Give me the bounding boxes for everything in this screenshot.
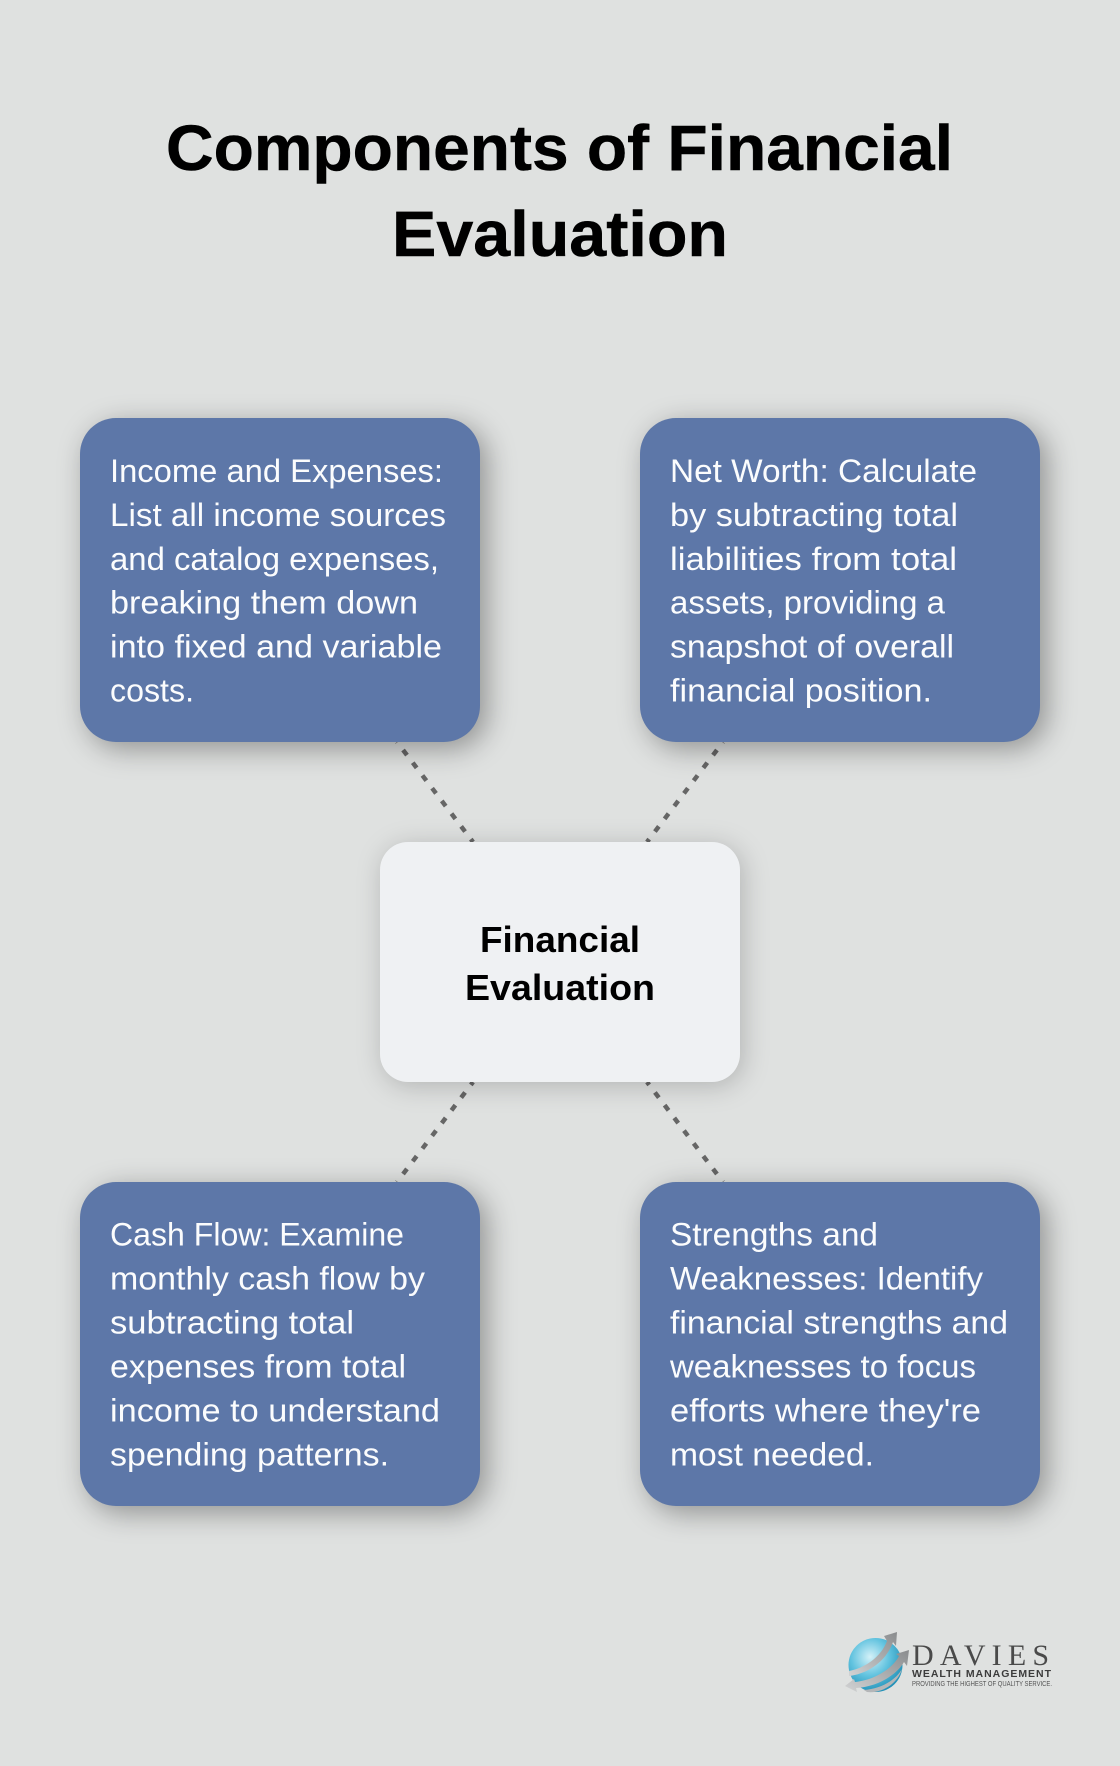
- panel: central hub: [380, 842, 740, 1082]
- panel: income and expenses: Income and Expenses:: [110, 453, 443, 489]
- logo: Davies Wealth Management: DAVIES: [912, 1639, 1049, 1672]
- panel: central hub: Financial: [480, 919, 640, 960]
- panel: net worth: Net Worth: Calculate: [670, 453, 977, 489]
- panel: strengths and weaknesses: Weaknesses: Identify: [670, 1260, 983, 1296]
- panel: strengths and weaknesses: financial strengths and: [670, 1304, 1008, 1340]
- panel: cash flow: spending patterns.: [110, 1436, 389, 1472]
- panel: strengths and weaknesses: efforts where they're: [670, 1392, 981, 1428]
- title: Components of Financial: [166, 112, 953, 184]
- logo: Davies Wealth Management: WEALTH MANAGEMENT: [912, 1668, 1052, 1680]
- panel: net worth: assets, providing a: [670, 584, 945, 620]
- panel: income and expenses: [80, 418, 480, 742]
- panel: cash flow: Cash Flow: Examine: [110, 1216, 404, 1252]
- panel: income and expenses: List all income sources: [110, 497, 446, 533]
- panel: income and expenses: and catalog expenses,: [110, 541, 439, 577]
- panel: strengths and weaknesses: weaknesses to focus: [669, 1348, 976, 1384]
- panel: income and expenses: breaking them down: [110, 584, 418, 620]
- panel: net worth: liabilities from total: [670, 541, 957, 577]
- title: [166, 112, 953, 270]
- panel: cash flow: [80, 1182, 480, 1506]
- panel: cash flow: monthly cash flow by: [110, 1260, 425, 1296]
- panel: strengths and weaknesses: Strengths and: [670, 1216, 878, 1252]
- panel: net worth: financial position.: [670, 672, 932, 708]
- logo: Davies Wealth Management: PROVIDING THE HIGHEST OF QUALITY SERVICE.: [912, 1681, 1052, 1688]
- panel: cash flow: expenses from total: [110, 1348, 406, 1384]
- connector: income and expenses to centre: [397, 742, 473, 842]
- panel: income and expenses: costs.: [110, 672, 194, 708]
- panel: strengths and weaknesses: [640, 1182, 1040, 1506]
- panel: cash flow: subtracting total: [110, 1304, 354, 1340]
- panel: net worth: by subtracting total: [670, 497, 958, 533]
- connector: strengths and weaknesses to centre: [647, 1082, 723, 1182]
- panel: central hub: Evaluation: [465, 967, 655, 1008]
- title: Evaluation: [392, 198, 728, 270]
- connector: net worth to centre: [647, 742, 723, 842]
- panel: net worth: [640, 418, 1040, 742]
- logo: Davies Wealth Management: [845, 1632, 1052, 1692]
- panel: net worth: snapshot of overall: [670, 628, 954, 664]
- panel: strengths and weaknesses: most needed.: [670, 1436, 874, 1472]
- panel: income and expenses: into fixed and variable: [110, 628, 442, 664]
- panel: cash flow: income to understand: [110, 1392, 440, 1428]
- icon: globe with arrows: [845, 1632, 909, 1692]
- connector: cash flow to centre: [397, 1082, 473, 1182]
